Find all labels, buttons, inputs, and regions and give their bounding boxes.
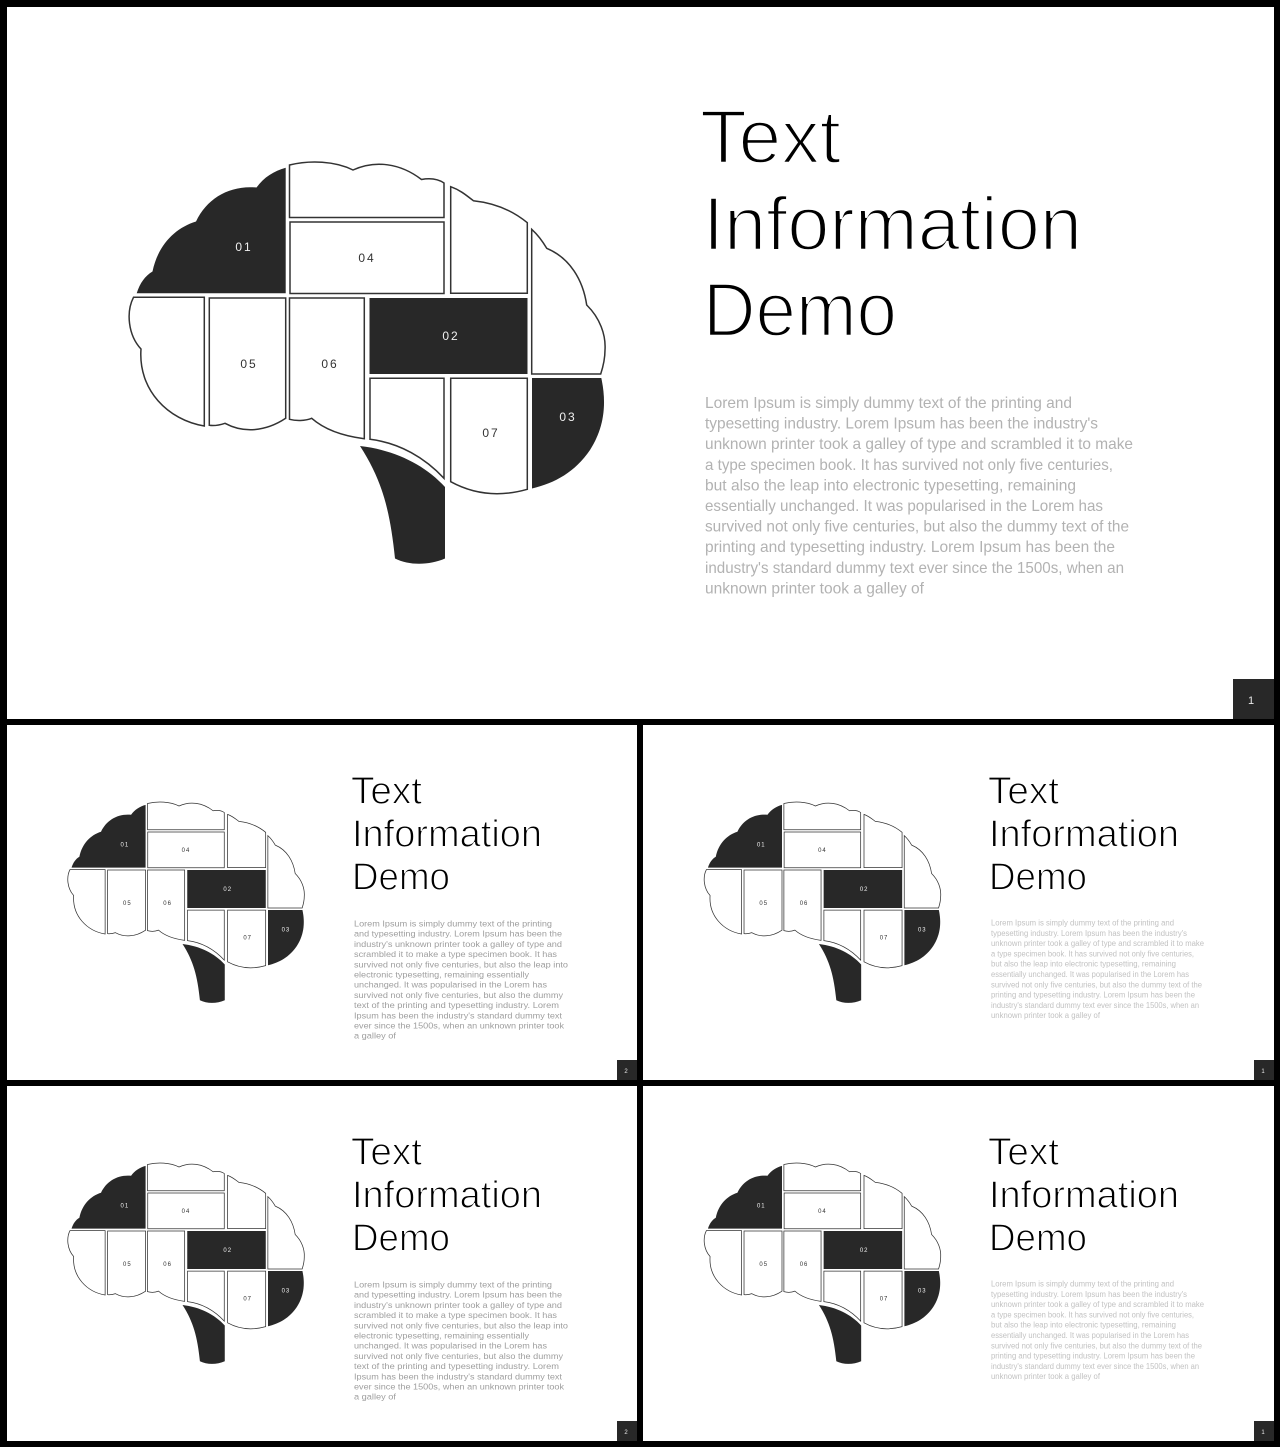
title: Information: [989, 1174, 1179, 1216]
segment numbers: 04: [182, 1209, 190, 1215]
title: Information: [352, 1174, 542, 1216]
page number tag: [1254, 1421, 1274, 1441]
body text: Lorem Ipsum is simply dummy text of the printing and: [991, 918, 1174, 928]
body text: unknown printer took a galley of: [991, 1372, 1101, 1381]
body text: unchanged. It was popularised in the Lorem has: [354, 980, 547, 990]
segment numbers: 05: [123, 1262, 132, 1268]
brain diagram: main: [129, 162, 605, 564]
body text: Lorem Ipsum is simply dummy text of the printing: [354, 1280, 552, 1290]
segment numbers: [235, 240, 577, 440]
body text: Ipsum has been the industry's standard dummy text: [354, 1010, 563, 1020]
body text: ever since the 1500s, when an unknown printer took: [354, 1382, 565, 1392]
body text: industry's unknown printer took a galley of type and: [354, 939, 562, 949]
segment numbers: 01: [121, 842, 129, 849]
body text: survived not only five centuries, but also the dummy: [354, 1351, 564, 1361]
segment numbers: 04: [818, 1209, 827, 1215]
segment numbers: 05: [759, 1262, 768, 1268]
brain diagram: [704, 1163, 941, 1364]
panel: small slide bottom left: [7, 1086, 637, 1441]
segment numbers: 07: [243, 935, 252, 942]
title: [988, 770, 1179, 898]
body text: and typesetting industry. Lorem Ipsum has been the: [354, 1290, 562, 1300]
body text: unknown printer took a galley of type and scrambled it to make: [991, 939, 1205, 948]
body text: [354, 918, 568, 1041]
title: Demo: [703, 268, 897, 353]
page number tag: [617, 1421, 637, 1441]
segment numbers: 01: [121, 1203, 129, 1210]
segment numbers: 05: [759, 901, 768, 907]
page number tag: 2: [624, 1430, 628, 1436]
body text: Ipsum has been the industry's standard dummy text: [354, 1371, 563, 1381]
body text: electronic typesetting, remaining essentially: [354, 970, 530, 980]
body text: text of the printing and typesetting industry. Lorem: [354, 1361, 559, 1371]
segment numbers: 07: [880, 1296, 888, 1303]
brain segment far right: [532, 229, 605, 374]
segment numbers: 06: [800, 901, 808, 907]
segment numbers: 02: [860, 887, 868, 893]
body text: industry's unknown printer took a galley of type and: [354, 1300, 562, 1310]
brain diagram: [704, 802, 941, 1003]
panel: small slide top left: [7, 725, 637, 1080]
body text: survived not only five centuries, but also the dummy text of the: [705, 519, 1129, 536]
segment numbers: 06: [800, 1262, 808, 1268]
body text: Lorem Ipsum is simply dummy text of the printing: [354, 918, 552, 928]
body text: a galley of: [354, 1031, 397, 1041]
body text: industry's standard dummy text ever since the 1500s, when an: [705, 560, 1124, 577]
page number tag: 1: [1261, 1430, 1265, 1436]
body text: electronic typesetting, remaining essentially: [354, 1330, 530, 1340]
body text: printing and typesetting industry. Lorem Ipsum has been the: [991, 1352, 1196, 1361]
segment numbers: 04: [358, 251, 376, 265]
body text: survived not only five centuries, but also the dummy: [354, 990, 564, 1000]
title: Demo: [352, 856, 450, 898]
segment numbers: 03: [559, 410, 577, 424]
body text: typesetting industry. Lorem Ipsum has been the industry's: [991, 929, 1187, 938]
page number tag: 2: [624, 1069, 628, 1075]
body text: scrambled it to make a type specimen book. It has: [354, 1310, 557, 1320]
body text: typesetting industry. Lorem Ipsum has been the industry's: [991, 1290, 1187, 1299]
title: Text: [351, 770, 422, 812]
body text: industry's standard dummy text ever since the 1500s, when an: [991, 1001, 1199, 1010]
body text: industry's standard dummy text ever since the 1500s, when an: [991, 1362, 1199, 1371]
body text: essentially unchanged. It was popularised in the Lorem has: [705, 498, 1103, 515]
brain segment 06: [290, 298, 364, 439]
brain segment 01: [137, 168, 286, 293]
body text: unknown printer took a galley of: [991, 1011, 1101, 1020]
brain diagram: [68, 802, 304, 1003]
segment numbers: [121, 1203, 290, 1303]
body text: a type specimen book. It has survived not only five centuries,: [705, 457, 1113, 474]
body text: typesetting industry. Lorem Ipsum has been the industry's: [705, 416, 1098, 433]
segment numbers: 06: [163, 1262, 172, 1268]
body text: [354, 1280, 568, 1402]
body text: printing and typesetting industry. Lorem Ipsum has been the: [705, 539, 1115, 556]
body text: [991, 1280, 1205, 1381]
body text: [991, 918, 1205, 1020]
body text: but also the leap into electronic typesetting, remaining: [991, 1321, 1176, 1330]
title: [351, 770, 542, 898]
brain segment 02: [370, 298, 528, 374]
title: Demo: [989, 1218, 1087, 1260]
brain segment top centre: [290, 162, 444, 218]
body text: essentially unchanged. It was popularised in the Lorem has: [991, 970, 1189, 979]
title: Text: [351, 1132, 422, 1174]
brain segment lower centre: [370, 378, 444, 478]
body text: and typesetting industry. Lorem Ipsum has been the: [354, 929, 562, 939]
body text: survived not only five centuries, but also the dummy text of the: [991, 980, 1203, 989]
segment numbers: 07: [482, 426, 500, 440]
title: Text: [700, 95, 841, 180]
title: Information: [989, 814, 1179, 856]
body text: survived not only five centuries, but also the leap into: [354, 959, 568, 969]
segment numbers: 06: [163, 901, 172, 907]
title: [700, 95, 1082, 353]
body text: unknown printer took a galley of: [705, 580, 925, 597]
title: Information: [703, 182, 1082, 267]
body text: ever since the 1500s, when an unknown printer took: [354, 1020, 565, 1030]
brain stem: [360, 446, 445, 564]
title: Text: [988, 1132, 1059, 1174]
body text: a galley of: [354, 1392, 397, 1402]
segment numbers: 01: [235, 240, 253, 254]
page number tag: 1: [1261, 1069, 1265, 1075]
body text: a type specimen book. It has survived not only five centuries,: [991, 949, 1194, 958]
title: Demo: [352, 1218, 450, 1260]
segment numbers: [757, 842, 927, 942]
segment numbers: 02: [223, 1248, 232, 1254]
body text: but also the leap into electronic typesetting, remaining: [705, 477, 1076, 494]
body text: unknown printer took a galley of type and scrambled it to make: [991, 1300, 1205, 1309]
segment numbers: 06: [321, 357, 339, 371]
segment numbers: 04: [818, 848, 827, 854]
segment numbers: 05: [240, 357, 258, 371]
brain segment 03: [532, 378, 604, 488]
body text: survived not only five centuries, but also the dummy text of the: [991, 1341, 1203, 1350]
body text: text of the printing and typesetting industry. Lorem: [354, 1000, 559, 1010]
segment numbers: 01: [757, 1203, 766, 1210]
title: Information: [352, 814, 542, 856]
body text: a type specimen book. It has survived not only five centuries,: [991, 1310, 1194, 1319]
body text: survived not only five centuries, but also the leap into: [354, 1320, 568, 1330]
segment numbers: 02: [442, 329, 460, 343]
page number tag: [1254, 1060, 1274, 1080]
body text: scrambled it to make a type specimen book. It has: [354, 949, 557, 959]
segment numbers: 01: [757, 842, 766, 849]
segment numbers: 07: [880, 935, 888, 942]
segment numbers: 05: [123, 901, 132, 907]
title: Demo: [989, 856, 1087, 898]
body text: unchanged. It was popularised in the Lorem has: [354, 1341, 547, 1351]
body text: unknown printer took a galley of type and scrambled it to make: [705, 436, 1133, 453]
segment numbers: 02: [860, 1248, 868, 1254]
title: Text: [988, 770, 1059, 812]
segment numbers: 03: [282, 1288, 290, 1295]
page number tag: [1233, 679, 1274, 719]
brain segment far left: [129, 297, 204, 426]
segment numbers: [757, 1203, 927, 1303]
brain segment 07: [451, 378, 527, 494]
segment numbers: 03: [918, 1288, 927, 1295]
segment numbers: 03: [282, 927, 290, 934]
panel: main slide: [7, 7, 1274, 719]
brain segment 05: [209, 298, 286, 430]
segment numbers: 04: [182, 848, 190, 854]
body text: [705, 395, 1133, 597]
brain segment upper right: [451, 187, 527, 293]
segment numbers: [121, 842, 290, 942]
panel: small slide top right: [643, 725, 1274, 1080]
page number tag: 1: [1248, 695, 1254, 707]
body text: Lorem Ipsum is simply dummy text of the printing and: [991, 1280, 1174, 1288]
brain diagram: [68, 1163, 304, 1364]
segment numbers: 02: [223, 887, 232, 893]
segment numbers: 07: [243, 1296, 252, 1303]
panel: small slide bottom right: [643, 1086, 1274, 1441]
title: [988, 1132, 1179, 1260]
body text: but also the leap into electronic typesetting, remaining: [991, 960, 1176, 969]
body text: printing and typesetting industry. Lorem Ipsum has been the: [991, 991, 1196, 1000]
title: [351, 1132, 542, 1260]
segment numbers: 03: [918, 927, 927, 934]
body text: essentially unchanged. It was popularised in the Lorem has: [991, 1331, 1189, 1340]
page number tag: [617, 1060, 637, 1080]
body text: Lorem Ipsum is simply dummy text of the printing and: [705, 395, 1072, 412]
brain segment 04: [290, 222, 444, 294]
